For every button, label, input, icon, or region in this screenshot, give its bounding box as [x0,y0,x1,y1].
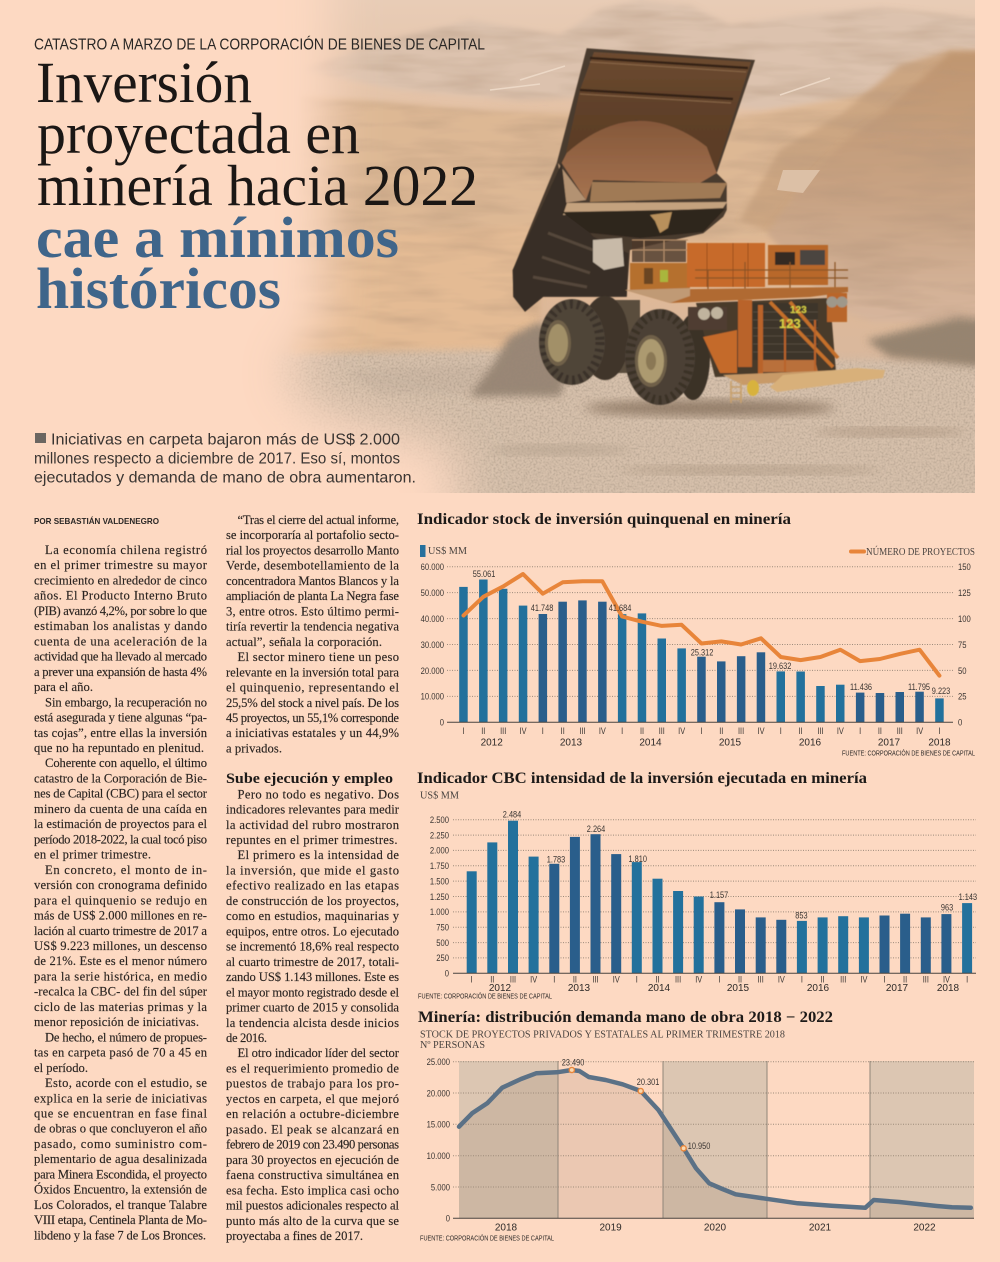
chart 1 quarter labels: I [462,726,465,736]
chart 1 value labels: 19.632 [769,661,792,671]
article column 1: la estimación de proyectos para el [34,817,208,831]
article column 2: 3, entre otros. Esto último permi- [226,604,399,618]
chart 1 right axis: 50 [958,665,967,676]
chart 2 axis: 2.250 [430,830,449,841]
article column 1: que no ha repuntado en plenitud. [34,741,204,755]
article column 1: ciclo de las materias primas y la [34,1000,207,1014]
article column 2: la tendencia alcista desde inicios [226,1016,399,1030]
article column 1: crecimiento en alrededor de cinco [34,574,207,588]
chart 2 axis: 2.000 [430,845,449,856]
chart 3 year labels: 2018 [495,1222,518,1234]
chart 2 year labels [489,983,960,994]
chart 1 year labels: 2015 [719,738,742,748]
chart 2 axis: 250 [436,953,449,963]
subheading: Sube ejecución y empleo [226,771,393,787]
article column 1: de obras o que concluyeron el año [34,1122,207,1136]
article column 2: relevante en la inversión total para [226,665,399,679]
chart 1 line: número de proyectos [464,574,939,676]
article column 2: El otro indicador líder del sector [238,1046,400,1060]
chart 1 quarter labels: II [799,726,803,736]
chart 1 quarter labels: III [738,726,744,736]
chart 2 value labels: 853 [795,911,808,921]
chart 2 quarter labels: II [821,975,825,985]
chart 1 left axis: 30.000 [421,639,444,650]
article column 2: primer cuarto de 2015 y consolida [226,1000,399,1014]
chart 3 year labels: 2022 [913,1222,936,1234]
article column 2: se incorporaría al portafolio secto- [226,528,399,542]
chart 2 quarter labels: III [592,975,599,985]
summary deck [34,432,416,486]
article column 2: como en estudios, maquinarias y [226,909,400,923]
article column 2: la inversión, que mide el gasto [226,864,399,878]
chart 1 year labels: 2018 [928,738,951,748]
chart 1 right axis: 100 [958,613,971,624]
chart 2: intensidad de la inversión [417,770,977,1000]
chart 2 quarter labels: II [738,975,742,985]
chart 2 quarter labels: I [883,975,886,985]
article column 1: Los Colorados, el tranque Talabre [34,1198,207,1212]
chart 2 year labels: 2012 [489,983,512,994]
chart 2 source: FUENTE: CORPORACIÓN DE BIENES DE CAPITAL [418,992,552,1000]
chart 1 quarter labels: III [817,726,823,736]
article column 2: mil puestos adicionales respecto al [226,1198,400,1212]
article column 1: estimaban los analistas y dando [34,619,207,633]
chart 2 axis: 1.250 [430,891,449,902]
chart 1 heading: Indicador stock de inversión quinquenal en minería [417,511,791,528]
article column 2: proyectaba a fines de 2017. [226,1229,363,1243]
truck number: 123 [779,316,801,331]
chart 2 axis: 1.750 [430,860,449,871]
title: proyectada en [37,101,360,166]
chart 2 quarter labels: I [553,975,555,985]
chart 3 value labels: 10.950 [688,1141,711,1151]
article column 1: Esto, acorde con el estudio, se [45,1076,207,1090]
chart 1 quarter labels: II [640,726,644,736]
article column 1: plementario de agua desalinizada [34,1152,207,1166]
chart 1 left axis: 20.000 [421,665,444,676]
chart 1 year labels: 2013 [560,738,583,748]
chart 3 value labels: 23.490 [562,1058,585,1068]
chart 2 axis: 2.500 [430,814,449,825]
article column 2: faena constructiva simultánea en [226,1168,400,1182]
chart 2 unit: US$ MM [420,790,460,802]
article column 1: nes de Capital (CBC) para el sector [34,787,208,801]
article column 1: que se encuentran en fase final [34,1106,208,1120]
article column 2: 25,5% del stock a nivel país. De los [226,696,399,710]
chart 2 value labels: 1.783 [547,855,566,865]
chart 2 quarter labels: III [675,975,681,985]
chart 3 year bands [459,1061,974,1218]
chart 1 year labels: 2017 [878,738,901,748]
chart 1 left axis: 40.000 [421,613,444,624]
article column 1: de 21%. Este es el menor número [34,954,207,968]
article column 2: equipos, entre otros. Lo ejecutado [226,924,399,938]
chart 1: stock de inversión [417,511,975,758]
article column 1: cuenta de una aceleración de la [34,634,207,648]
article column 2: actual”, señala la corporación. [226,635,382,649]
article column 2 [226,513,400,1243]
chart 2 year labels: 2016 [807,983,830,994]
chart 2 quarter labels: III [923,975,929,985]
article column 1: en el primer trimestre. [34,848,151,862]
chart 2 year labels: 2018 [937,983,960,994]
chart 2 heading: Indicador CBC intensidad de la inversión ejecutada en minería [417,770,867,787]
article column 2: Pero no todo es negativo. Dos [238,787,399,801]
summary deck: millones respecto a diciembre de 2017. Eso sí, montos [34,450,400,468]
article column 1: libdeno y la fase 7 de Los Bronces. [34,1228,206,1242]
article column 2: pasado. El peak se alcanzará en [226,1122,400,1136]
article column 2: esa fecha. Esto implica casi ocho [226,1183,399,1197]
article column 2: la actividad del rubro mostraron [226,818,400,832]
chart 2 axis [430,814,449,979]
chart 1 year labels: 2016 [799,738,822,748]
chart 1 left axis: 10.000 [421,691,444,702]
chart 2 quarter labels: IV [778,975,785,985]
chart 3 subtitle: Nº PERSONAS [420,1040,485,1051]
chart 1 year labels: 2014 [639,738,662,748]
chart 1 quarter labels: IV [520,726,527,736]
article column 1: actividad que ha llevado al mercado [34,650,207,664]
article column 1: versión con cronograma definido [34,878,207,892]
chart 2 quarter labels: IV [530,975,538,985]
article column 1: el período. [34,1061,88,1075]
chart 2 quarter labels: I [801,975,803,985]
chart 3 subtitle [420,1030,785,1051]
article column 1: De hecho, el número de propues- [45,1030,207,1044]
chart 2 quarter labels: III [840,975,846,985]
article column 2: es el requerimiento promedio de [226,1062,399,1076]
chart 1 value labels [473,569,951,696]
article column 2: febrero de 2019 con 23.490 personas [226,1138,399,1152]
chart 1 right axis [958,561,971,728]
chart 2 quarter labels: IV [613,975,620,985]
chart 2 quarter labels [471,975,968,985]
article column 2: zando US$ 1.143 millones. Este es [226,970,399,984]
article column 1: En concreto, el monto de in- [45,863,207,877]
chart 2 year labels: 2017 [886,983,909,994]
article column 1: para la serie histórica, en medio [34,969,207,983]
truck number [779,305,807,331]
article column 2: punto más alto de la curva que se [226,1214,399,1228]
article column 2: ampliación de planta La Negra fase [226,589,399,603]
chart 3 axis: 20.000 [427,1088,450,1098]
chart 1 quarter labels: IV [916,726,924,736]
article column 1: tas cojas”, entre ellas la inversión [34,726,208,740]
chart 1 left axis [421,561,444,728]
truck chassis and cab [625,240,885,403]
chart 1 value labels: 25.312 [691,648,714,658]
chart 2 bars [467,821,972,973]
chart 1 right axis: 0 [958,717,963,728]
article column 2: en relación a octubre-diciembre [226,1107,399,1121]
article column 1: para el quinquenio se redujo en [34,893,208,907]
chart 3 markers [569,1067,686,1151]
chart 1 quarter labels: III [579,726,586,736]
chart 2 quarter labels: II [903,975,907,985]
article column 2: de construcción de los proyectos, [226,894,399,908]
title [36,50,478,321]
chart 1 quarter labels: I [780,726,782,736]
article column 2: Verde, desembotellamiento de la [226,559,399,573]
article column 2: tiría revertir la tendencia negativa [226,620,399,634]
chart 3 year labels [495,1222,936,1234]
chart 2 quarter labels: III [510,975,516,985]
article column 2: el mayor monto registrado desde el [226,985,400,999]
chart 3 axis [427,1056,450,1224]
chart 3 heading: Minería: distribución demanda mano de obra 2018 − 2022 [418,1009,833,1026]
article column 1: (PIB) avanzó 4,2%, por sobre lo que [34,604,207,618]
chart 1 quarter labels: IV [837,726,844,736]
chart 2 quarter labels: IV [943,975,950,985]
chart 3 axis: 25.000 [427,1056,450,1067]
chart 1 quarter labels: II [878,726,882,736]
truck number: 123 [790,305,807,316]
chart 3 axis: 10.000 [427,1150,450,1161]
chart 2 year labels: 2014 [648,983,671,994]
article column 2: de 2016. [226,1031,267,1045]
truck wheels [539,296,710,405]
chart 3: demanda de mano de obra [418,1009,974,1242]
article column 1: tas en carpeta pasó de 70 a 45 en [34,1046,208,1060]
article column 1: pasado, como suministro com- [34,1137,207,1151]
chart 1 quarter labels: II [561,726,565,736]
article column 2: repuntes en el primer trimestres. [226,833,398,847]
title: Inversión [36,50,252,115]
article column 2: se incrementó 18,6% real respecto [226,940,399,954]
chart 1 quarter labels: III [897,726,903,736]
article column 2: El primero es la intensidad de [238,848,399,862]
chart 3 value labels: 20.301 [637,1077,660,1087]
chart 1 year labels [481,738,951,748]
article column 1: lación al cuarto trimestre de 2017 a [34,924,207,938]
chart 1 quarter labels: II [719,726,723,736]
chart 2 quarter labels: II [655,975,660,985]
chart 2 axis: 0 [445,968,449,979]
chart 3 year labels: 2020 [704,1222,727,1234]
chart 1 value labels: 9.223 [932,686,951,696]
article column 1: explica en la serie de iniciativas [34,1091,207,1105]
chart 1 legend: número de proyectos: NÚMERO DE PROYECTOS [866,546,975,558]
chart 1 right axis: 125 [958,587,971,598]
chart 1 value labels: 55.061 [473,569,496,579]
chart 1 right axis: 75 [958,639,967,650]
article column 2: concentradora Mantos Blancos y la [226,574,399,588]
chart 1 value labels: 11.436 [850,682,872,692]
chart 1 year labels: 2012 [481,738,503,748]
chart 2 value labels: 1.143 [959,892,977,902]
chart 1 quarter labels: III [500,726,506,736]
article column 1: -recalca la CBC- del fin del súper [34,985,208,999]
chart 1 quarter labels: II [481,726,485,736]
article column 1: La economía chilena registró [45,543,207,557]
chart 1 value labels: 11.795 [908,682,930,692]
article column 1: US$ 9.223 millones, un descenso [34,939,207,953]
article column 2: indicadores relevantes para medir [226,803,400,817]
chart 1 quarter labels: I [938,726,940,736]
article column 1: más de US$ 2.000 millones en re- [34,908,207,922]
kicker: CATASTRO A MARZO DE LA CORPORACIÓN DE BIENES DE CAPITAL [34,36,485,54]
article column 2: “Tras el cierre del actual informe, [238,513,399,527]
chart 2 axis: 1.500 [430,876,449,887]
chart 2 value labels: 2.484 [503,810,522,820]
article column 1: en el primer trimestre su mayor [34,558,208,572]
article column 2: para 30 proyectos en ejecución de [226,1153,399,1167]
article column 1: Sin embargo, la recuperación no [45,695,207,709]
chart 2 value labels: 1.157 [710,890,729,900]
article column 1 [34,543,208,1242]
chart 1 right axis: 25 [958,691,967,702]
truck bed [513,48,755,312]
article column 1: para el año. [34,680,93,694]
chart 2 quarter labels: I [966,975,968,985]
chart 1 legend: US$ MM: US$ MM [428,546,468,557]
chart 3 axis: 0 [446,1213,450,1224]
chart 3 axis: 15.000 [427,1119,450,1130]
icon: bullet square [35,433,46,443]
chart 3 year labels: 2021 [809,1222,832,1234]
chart 2 quarter labels: III [758,975,764,985]
byline: POR SEBASTIÁN VALDENEGRO [34,516,159,526]
chart 1 quarter labels [462,726,940,736]
article column 1: a prever una expansión de hasta 4% [34,665,208,679]
article column 1: período 2018-2022, la cual tocó piso [34,832,207,846]
ground [290,348,975,493]
article column 1: catastro de la Corporación de Bie- [34,772,207,786]
summary deck: ejecutados y demanda de mano de obra aumentaron. [34,470,416,486]
chart 3 area under curve [459,1070,974,1218]
title: históricos [36,256,281,321]
chart 2 axis: 1.000 [430,907,449,917]
chart 2 value labels [503,810,977,921]
chart 3 curve [459,1070,971,1208]
rock piles [345,318,1000,396]
article column 2: El sector minero tiene un peso [238,650,399,664]
chart 1 quarter labels: IV [758,726,765,736]
chart 1 quarter labels: I [700,726,703,736]
chart 2 quarter labels: I [471,975,473,985]
article column 2: yectos en carpeta, el que mejoró [226,1092,399,1106]
photo: mining truck dumping in open-pit mine [274,0,975,493]
chart 2 quarter labels: II [573,975,577,985]
article column 1: VIII etapa, Centinela Planta de Mo- [34,1213,207,1227]
chart 1 quarter labels: I [621,726,623,736]
article column 2: el quinquenio, representando el [226,680,400,694]
article column 1: Coherente con aquello, el último [45,756,207,770]
chart 2 year labels: 2013 [568,983,591,994]
article column 1: minero da cuenta de una caída en [34,802,208,816]
chart 1 right axis: 150 [958,561,971,572]
chart 1 quarter labels: I [859,726,861,736]
chart 3 subtitle: STOCK DE PROYECTOS PRIVADOS Y ESTATALES AL PRIMER TRIMESTRE 2018 [420,1030,785,1040]
chart 2 value labels: 2.264 [587,824,606,834]
chart 1 left axis: 60.000 [421,561,444,572]
title: minería hacia 2022 [37,153,478,218]
chart 3 source: FUENTE: CORPORACIÓN DE BIENES DE CAPITAL [420,1234,554,1242]
chart 3 value labels [562,1058,711,1151]
article column 2: puestos de trabajo para los pro- [226,1077,399,1091]
chart 1 quarter labels: IV [599,726,606,736]
chart 1 bars [459,580,944,722]
article column 2: a iniciativas estatales y un 44,9% [226,726,400,740]
chart 1 value labels: 41.748 [531,603,554,613]
chart 2 quarter labels: II [490,975,494,985]
chart 2 axis: 750 [436,922,449,933]
article column 1: años. El Producto Interno Bruto [34,589,207,603]
article column 2: a privados. [226,742,282,756]
article column 2: 45 proyectos, un 55,1% corresponde [226,711,399,725]
chart 1 left axis: 50.000 [421,587,444,598]
chart 2 quarter labels: IV [695,975,703,985]
article column 1: para Minera Escondida, el proyecto [34,1167,207,1181]
chart 2 value labels: 1.810 [629,854,647,864]
truck [513,48,885,405]
chart 2 year labels: 2015 [727,983,750,994]
chart 2 quarter labels: I [718,975,720,985]
article column 2: efectivo realizado en las etapas [226,879,399,893]
chart 2 quarter labels: I [636,975,638,985]
article column 1: está asegurada y tiene algunas “pa- [34,710,207,724]
chart 3 axis: 5.000 [431,1182,450,1192]
summary deck: Iniciativas en carpeta bajaron más de US$ 2.000 [51,432,400,448]
article column 1: Óxidos Encuentro, la extensión de [34,1183,207,1197]
chart 2 value labels: 963 [941,903,954,913]
chart 1 left axis: 0 [440,717,444,728]
chart 1 quarter labels: IV [678,726,686,736]
article column 1: menor reposición de iniciativas. [34,1015,199,1029]
chart 3 year labels: 2019 [599,1222,622,1234]
chart 1 quarter labels: I [542,726,544,736]
chart 1 value labels: 41.684 [609,603,632,613]
chart 2 axis: 500 [436,937,449,948]
article column 2: rial los proyectos desarrollo Manto [226,544,399,558]
chart 1 quarter labels: III [659,726,665,736]
chart 2 quarter labels: IV [860,975,868,985]
title: cae a mínimos [36,205,399,270]
article column 2: al cuarto trimestre de 2017, totali- [226,955,399,969]
